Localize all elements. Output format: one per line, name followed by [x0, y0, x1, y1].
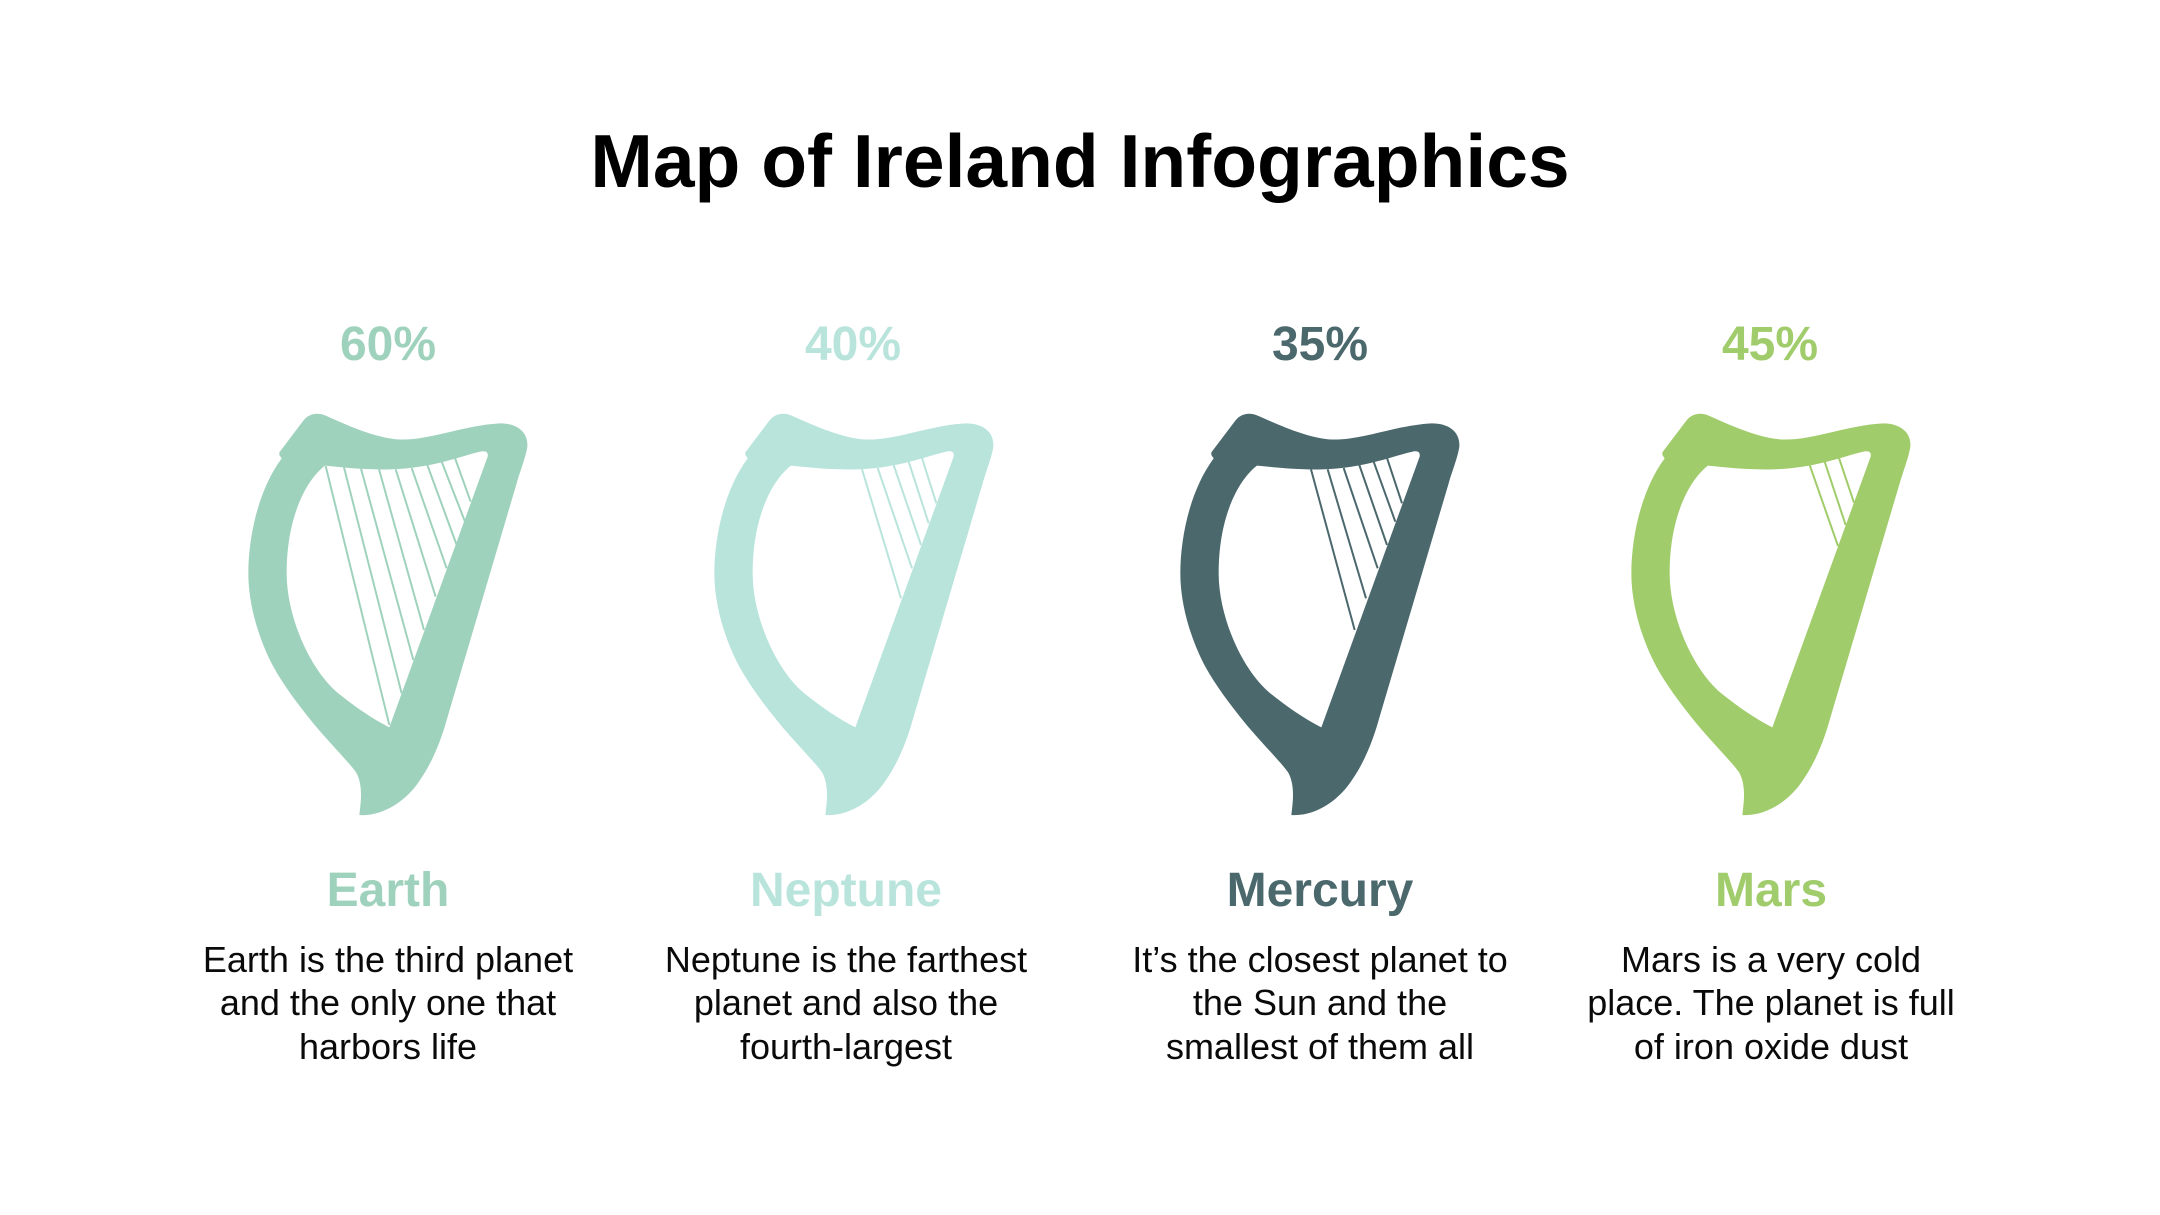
- description: Mercury: It’s the closest planet to: [1132, 938, 1508, 980]
- description: Neptune: fourth-largest: [740, 1026, 952, 1067]
- heading: Mars: Mars: [1715, 864, 1827, 916]
- heading: Mercury: Mercury: [1227, 864, 1413, 916]
- heading: Earth: Earth: [327, 864, 449, 916]
- description: Mercury: smallest of them all: [1166, 1026, 1474, 1067]
- icon: Neptune harp, five strings: [714, 414, 994, 816]
- description: Neptune: planet and also the: [694, 982, 998, 1023]
- percentage: Neptune: 40%: [805, 318, 901, 370]
- description: Earth: Earth is the third planet: [203, 938, 573, 980]
- percentage: Mars: 45%: [1722, 318, 1818, 370]
- percentage: Earth: 60%: [340, 318, 436, 370]
- panel: Earth: [203, 318, 573, 1067]
- description: Earth: harbors life: [299, 1026, 477, 1067]
- title: Map of Ireland Infographics: [590, 118, 1570, 202]
- description: Mars: of iron oxide dust: [1634, 1026, 1908, 1067]
- description: Earth: and the only one that: [220, 982, 556, 1023]
- description: Neptune: [665, 938, 1027, 1067]
- icon: Mars harp, three strings: [1631, 414, 1910, 816]
- description: Mars: Mars is a very cold: [1621, 938, 1921, 980]
- description: Mars: place. The planet is full: [1587, 982, 1955, 1023]
- description: Mercury: [1132, 938, 1508, 1067]
- description: Earth: [203, 938, 573, 1067]
- panel: Mars: [1587, 318, 1955, 1067]
- icon: Earth harp, nine strings: [248, 414, 528, 816]
- description: Neptune: Neptune is the farthest: [665, 938, 1027, 980]
- icon: Mercury harp, six strings: [1180, 414, 1460, 816]
- description: Mars: [1587, 938, 1955, 1067]
- panel: Neptune: [665, 318, 1027, 1067]
- description: Mercury: the Sun and the: [1193, 982, 1447, 1023]
- heading: Neptune: Neptune: [750, 864, 942, 916]
- panel: Mercury: [1132, 318, 1508, 1067]
- percentage: Mercury: 35%: [1272, 318, 1368, 370]
